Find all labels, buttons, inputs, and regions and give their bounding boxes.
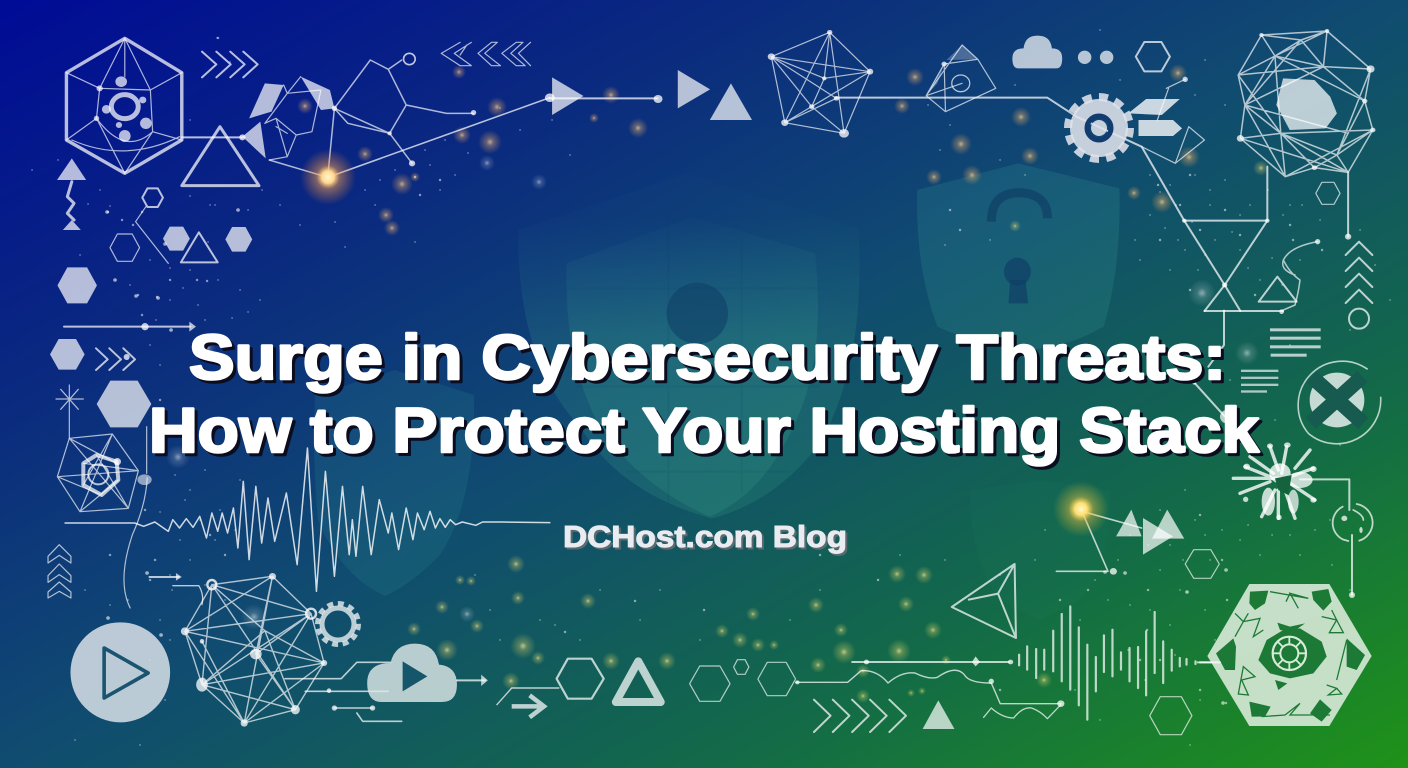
- shield: large center: [518, 173, 860, 518]
- icon: disc with cross and broken ring: [1298, 361, 1381, 444]
- icon: rocket polygon: [926, 45, 996, 112]
- icon: curly connector: [1282, 239, 1320, 311]
- icon: hexagon with stem: [136, 188, 168, 263]
- vertical curve: [124, 478, 147, 608]
- small arrow: [149, 573, 182, 581]
- icon: arrow blocks: [1128, 77, 1204, 163]
- icon: small gear lower left: [318, 604, 358, 644]
- icon: rounded triangle: [616, 661, 661, 702]
- connector and ring node: [1300, 479, 1373, 598]
- icon: polyhedron: [768, 30, 873, 138]
- icon: hollow up chevrons: [48, 545, 71, 598]
- icon: chevrons right lower: [814, 700, 906, 732]
- audio bars: [1019, 606, 1196, 720]
- icon: triple triangles: [1116, 510, 1184, 555]
- bright glow: yellow: [1053, 481, 1109, 537]
- icon: triangle outline: [182, 127, 259, 186]
- icon: two dots: [1078, 51, 1113, 64]
- hexagon row: [690, 660, 796, 701]
- title line 2: How to Protect Your Hosting Stack: [149, 396, 1260, 466]
- icon: circle outline: [1349, 309, 1369, 329]
- icon: thin hexagon: [110, 234, 140, 261]
- circuit lines to cloud: [285, 662, 402, 721]
- seismic waveform: [65, 448, 550, 591]
- icon: chevrons left outlined: [441, 42, 531, 66]
- title line 1: Surge in Cybersecurity Threats:: [189, 323, 1226, 393]
- icon: thin hexagon: [1316, 182, 1340, 204]
- wave connector: [795, 670, 1064, 707]
- background shields: [314, 163, 1120, 620]
- icon: thick arrow: [512, 695, 544, 717]
- icon: filled triangle: [923, 700, 954, 729]
- icon: hexagon: [50, 339, 85, 370]
- icon: play triangle with line: [545, 77, 663, 115]
- icon: triangle outline: [1259, 277, 1297, 302]
- icon: central gear top: [1068, 97, 1130, 159]
- icon: large hexagon: [97, 381, 151, 427]
- node line: [852, 656, 1013, 666]
- small wave line: [984, 705, 1061, 719]
- lower center-right cluster: [690, 510, 1219, 735]
- icon: small triangle: [181, 232, 218, 262]
- gold node lines: [1056, 511, 1142, 575]
- bright glow: orange: [300, 149, 356, 205]
- curved connector: [146, 427, 148, 473]
- lower right cluster: [1200, 442, 1373, 726]
- title: [149, 323, 1260, 466]
- icon: triangle: [678, 70, 710, 108]
- wire to gear: [836, 98, 1225, 285]
- connector hexagon to network: [182, 136, 242, 138]
- subtitle: DCHost.com Blog: [563, 519, 847, 554]
- icon: small polyhedron: [57, 434, 138, 512]
- connector lines: [1192, 309, 1284, 423]
- icon: filled hexagon: [163, 227, 190, 251]
- left middle cluster: [50, 322, 196, 512]
- icon: zigzag arrow: [57, 158, 86, 230]
- icon: play disc: [70, 622, 170, 722]
- icon: filled hexagon large: [57, 267, 97, 303]
- icon: cloud with play: [367, 644, 488, 702]
- icon: hexagon with connector: [497, 659, 604, 705]
- glowing particles: [166, 64, 1269, 703]
- icon: wireframe hexagon with molecule: [66, 38, 182, 173]
- icon: triangle: [710, 83, 752, 120]
- icon: asterisk star: [56, 385, 83, 438]
- icon: hexagon outline: [1136, 42, 1170, 71]
- top-left cluster: [57, 38, 710, 303]
- right circuit lines: [1182, 167, 1351, 311]
- right column icons: [1192, 239, 1381, 444]
- icon: chevrons: [96, 348, 135, 370]
- icon: text lines large: [1270, 328, 1321, 357]
- icon: virus burst: [1233, 442, 1317, 520]
- shield: left small: [314, 370, 474, 596]
- icon: neural network: [181, 573, 327, 727]
- network wire: [173, 586, 203, 605]
- shield: faint lower right: [970, 480, 1110, 620]
- icon: large hexagon emblem: [1207, 584, 1372, 726]
- icon: triangle wireframe: [952, 564, 1016, 638]
- shield: right with padlock: [917, 163, 1120, 350]
- node blob on curve: [137, 474, 152, 485]
- icon: molecular network with glow line: [239, 53, 550, 177]
- thin hexagons: [1150, 550, 1219, 735]
- arrow line: [64, 322, 196, 332]
- lower left cluster: [48, 448, 661, 727]
- center-top polyhedron and wire: [710, 29, 1375, 311]
- wire into hexagon: [1200, 661, 1220, 663]
- icon: text lines small: [1241, 370, 1278, 393]
- right polyhedron: [1237, 29, 1375, 177]
- icon: chevrons right: [202, 52, 258, 77]
- icon: cloud: [1012, 36, 1062, 68]
- audio line: [1198, 661, 1211, 663]
- icon: filled hexagon: [225, 227, 252, 252]
- icon: up chevrons: [1346, 242, 1372, 303]
